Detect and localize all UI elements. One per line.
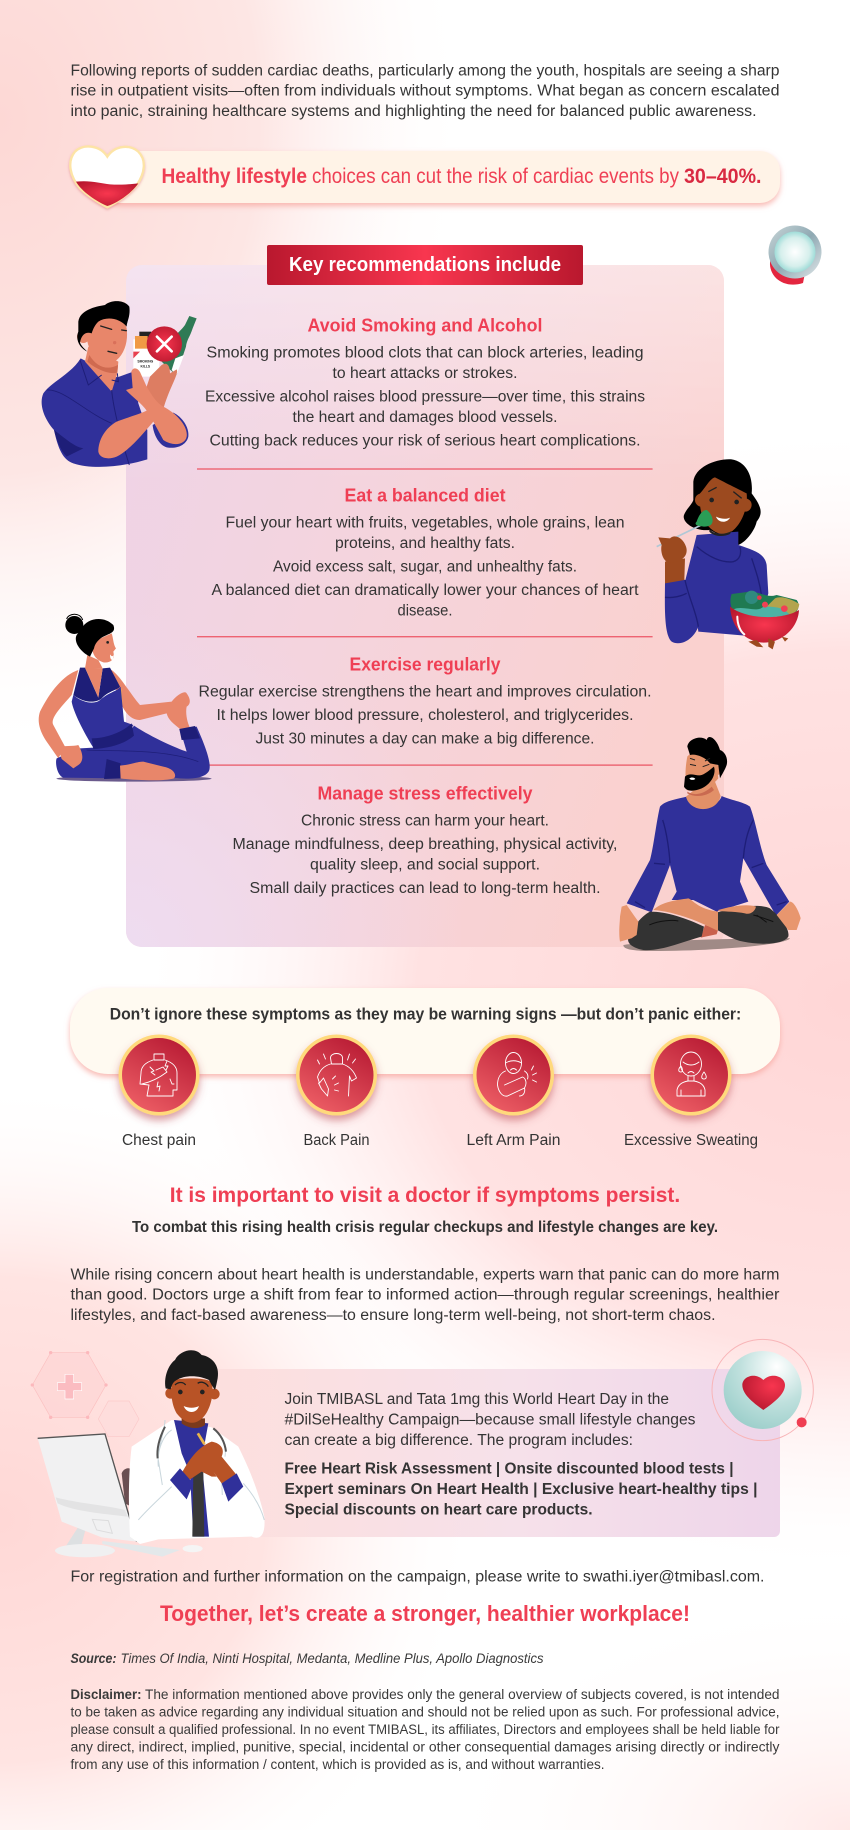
section: eat a balanced diet: Fuel your heart with fruits, vegetables, whole grains, lean — [226, 514, 624, 532]
illustration: man refusing cigarettes and alcohol — [42, 301, 197, 467]
symptom labels: Chest pain — [122, 1132, 196, 1149]
campaign text: Expert seminars On Heart Health | Exclusive heart-healthy tips | — [284, 1481, 758, 1498]
cigarette pack — [133, 332, 159, 377]
illustration: doctor at desk — [31, 1350, 265, 1557]
callout: lifestyle statistic — [70, 146, 780, 207]
cigarette pack: KILLS — [141, 364, 151, 368]
campaign text: #DilSeHealthy Campaign—because small lifestyle changes — [284, 1412, 696, 1428]
section: exercise regularly: It helps lower blood pressure, cholesterol, and triglycerides. — [216, 707, 634, 724]
heading banner — [267, 245, 583, 285]
campaign text — [284, 1391, 758, 1518]
symptom labels: Left Arm Pain — [466, 1132, 560, 1149]
intro paragraph: rise in outpatient visits—often from individuals without symptoms. What began as concern escalated — [70, 82, 780, 100]
section: avoid smoking and alcohol: Avoid Smoking and Alcohol — [308, 314, 542, 336]
section: eat a balanced diet: Eat a balanced diet — [344, 484, 506, 506]
section: eat a balanced diet: A balanced diet can dramatically lower your chances of heart — [212, 582, 639, 599]
section: avoid smoking and alcohol: the heart and damages blood vessels. — [292, 409, 558, 426]
campaign text: can create a big difference. The program includes: — [284, 1432, 633, 1449]
illustration: bearded man meditating — [619, 737, 801, 951]
subheading: checkups: To combat this rising health crisis regular checkups and lifestyle changes are key. — [132, 1219, 718, 1236]
disclaimer: to be taken as advice regarding any individual situation and should not be relied upon as such. For professional advice, — [70, 1704, 780, 1720]
callout text: Healthy lifestyle — [162, 165, 307, 188]
symptoms heading: Don’t ignore these symptoms as they may be warning signs —but don’t panic either: — [110, 1006, 741, 1024]
campaign text: Free Heart Risk Assessment | Onsite discounted blood tests | — [284, 1460, 734, 1478]
paragraph: informed action: lifestyles, and fact-based awareness—to ensure long-term well-being, not short-term chaos. — [70, 1307, 716, 1324]
disclaimer: please consult a qualified professional. In no event TMIBASL, its affiliates, Directors and employees shall be held liable for — [70, 1722, 780, 1737]
icon: chest pain — [118, 1034, 200, 1116]
disclaimer: from any use of this information / content, which is provided as is, and without warranties. — [70, 1757, 604, 1772]
panel: key recommendations — [126, 245, 724, 947]
icon: half-filled heart — [70, 146, 144, 207]
icon: back pain — [296, 1034, 377, 1116]
section: manage stress: Manage mindfulness, deep breathing, physical activity, — [232, 836, 618, 853]
section: exercise regularly: Regular exercise strengthens the heart and improves circulation. — [198, 684, 652, 700]
intro paragraph: Following reports of sudden cardiac deaths, particularly among the youth, hospitals are seeing a sharp — [70, 62, 780, 80]
disclaimer: any direct, indirect, implied, punitive, special, incidental or other consequential damages arising directly or indirectly — [70, 1740, 780, 1754]
section: avoid smoking and alcohol: to heart attacks or strokes. — [332, 365, 518, 382]
paragraph: informed action — [70, 1266, 780, 1324]
heading banner: Key recommendations include — [289, 254, 561, 276]
section: exercise regularly — [198, 654, 652, 748]
icon: left arm pain — [473, 1034, 554, 1116]
panel: campaign — [200, 1369, 780, 1537]
section: avoid smoking and alcohol: Smoking promotes blood clots that can block arteries, leading — [206, 344, 644, 362]
symptom labels: Excessive Sweating — [624, 1132, 758, 1149]
section: avoid smoking and alcohol: Cutting back reduces your risk of serious heart complications. — [210, 432, 640, 450]
decorative hexagons with cross — [31, 1351, 139, 1437]
callout text: 30–40%. — [684, 165, 762, 188]
section: exercise regularly: Exercise regularly — [350, 654, 501, 674]
closing headline: Together, let’s create a stronger, healthier workplace! — [160, 1601, 690, 1626]
alcohol bottle — [162, 316, 197, 375]
callout text — [162, 165, 762, 188]
paragraph: informed action: than good. Doctors urge a shift from fear to informed action—through regular screenings, healthier — [70, 1286, 780, 1304]
campaign text: Special discounts on heart care products. — [284, 1502, 592, 1518]
icon: decorative orb top right — [768, 226, 822, 285]
heading: visit a doctor: It is important to visit a doctor if symptoms persist. — [170, 1183, 680, 1207]
panel background — [126, 265, 724, 947]
intro paragraph: into panic, straining healthcare systems and highlighting the need for balanced public awareness. — [70, 103, 757, 120]
source line: Source: — [70, 1651, 116, 1666]
icon: heart in orb — [712, 1339, 813, 1441]
paragraph: informed action: While rising concern about heart health is understandable, experts warn that panic can do more harm — [70, 1266, 780, 1284]
section: eat a balanced diet: proteins, and healthy fats. — [335, 535, 515, 552]
disclaimer: The information mentioned above provides only the general overview of subjects covered, is not intended — [145, 1687, 780, 1702]
disclaimer: Disclaimer: — [70, 1687, 142, 1702]
monitor — [38, 1434, 203, 1557]
section: avoid smoking and alcohol — [205, 314, 645, 450]
section: avoid smoking and alcohol: Excessive alcohol raises blood pressure—over time, this strains — [205, 388, 645, 406]
symptom labels: Back Pain — [304, 1132, 370, 1149]
source line: Times Of India, Ninti Hospital, Medanta, Medline Plus, Apollo Diagnostics — [120, 1651, 544, 1666]
campaign text: Join TMIBASL and Tata 1mg this World Heart Day in the — [284, 1391, 669, 1408]
section: manage stress: quality sleep, and social support. — [310, 856, 540, 874]
registration line: For registration and further information on the campaign, please write to swathi.iyer@tmibasl.com. — [70, 1568, 764, 1586]
no-entry cross badge — [147, 326, 182, 362]
campaign background — [200, 1369, 780, 1537]
symptoms pill — [70, 988, 780, 1074]
intro paragraph — [70, 62, 780, 120]
callout pill — [100, 151, 780, 203]
section: eat a balanced diet: Avoid excess salt, sugar, and unhealthy fats. — [273, 558, 577, 576]
section: manage stress: Small daily practices can lead to long-term health. — [250, 880, 600, 897]
section: manage stress: Manage stress effectively — [318, 782, 533, 804]
cigarette pack: SMOKING — [137, 360, 154, 364]
illustration: woman in yoga pose — [39, 614, 212, 782]
illustration: woman eating salad — [657, 459, 799, 649]
section: eat a balanced diet: disease. — [398, 602, 452, 620]
section: exercise regularly: Just 30 minutes a day can make a big difference. — [256, 730, 594, 748]
section: manage stress: Chronic stress can harm your heart. — [301, 812, 549, 830]
symptom labels — [122, 1132, 758, 1149]
callout text: choices can cut the risk of cardiac events by — [312, 165, 679, 188]
section: eat a balanced diet — [212, 484, 639, 620]
icon: excessive sweating — [650, 1034, 732, 1116]
panel: symptoms — [70, 988, 780, 1149]
section: manage stress — [232, 782, 618, 897]
salad bowl — [730, 591, 799, 649]
disclaimer — [70, 1687, 780, 1772]
